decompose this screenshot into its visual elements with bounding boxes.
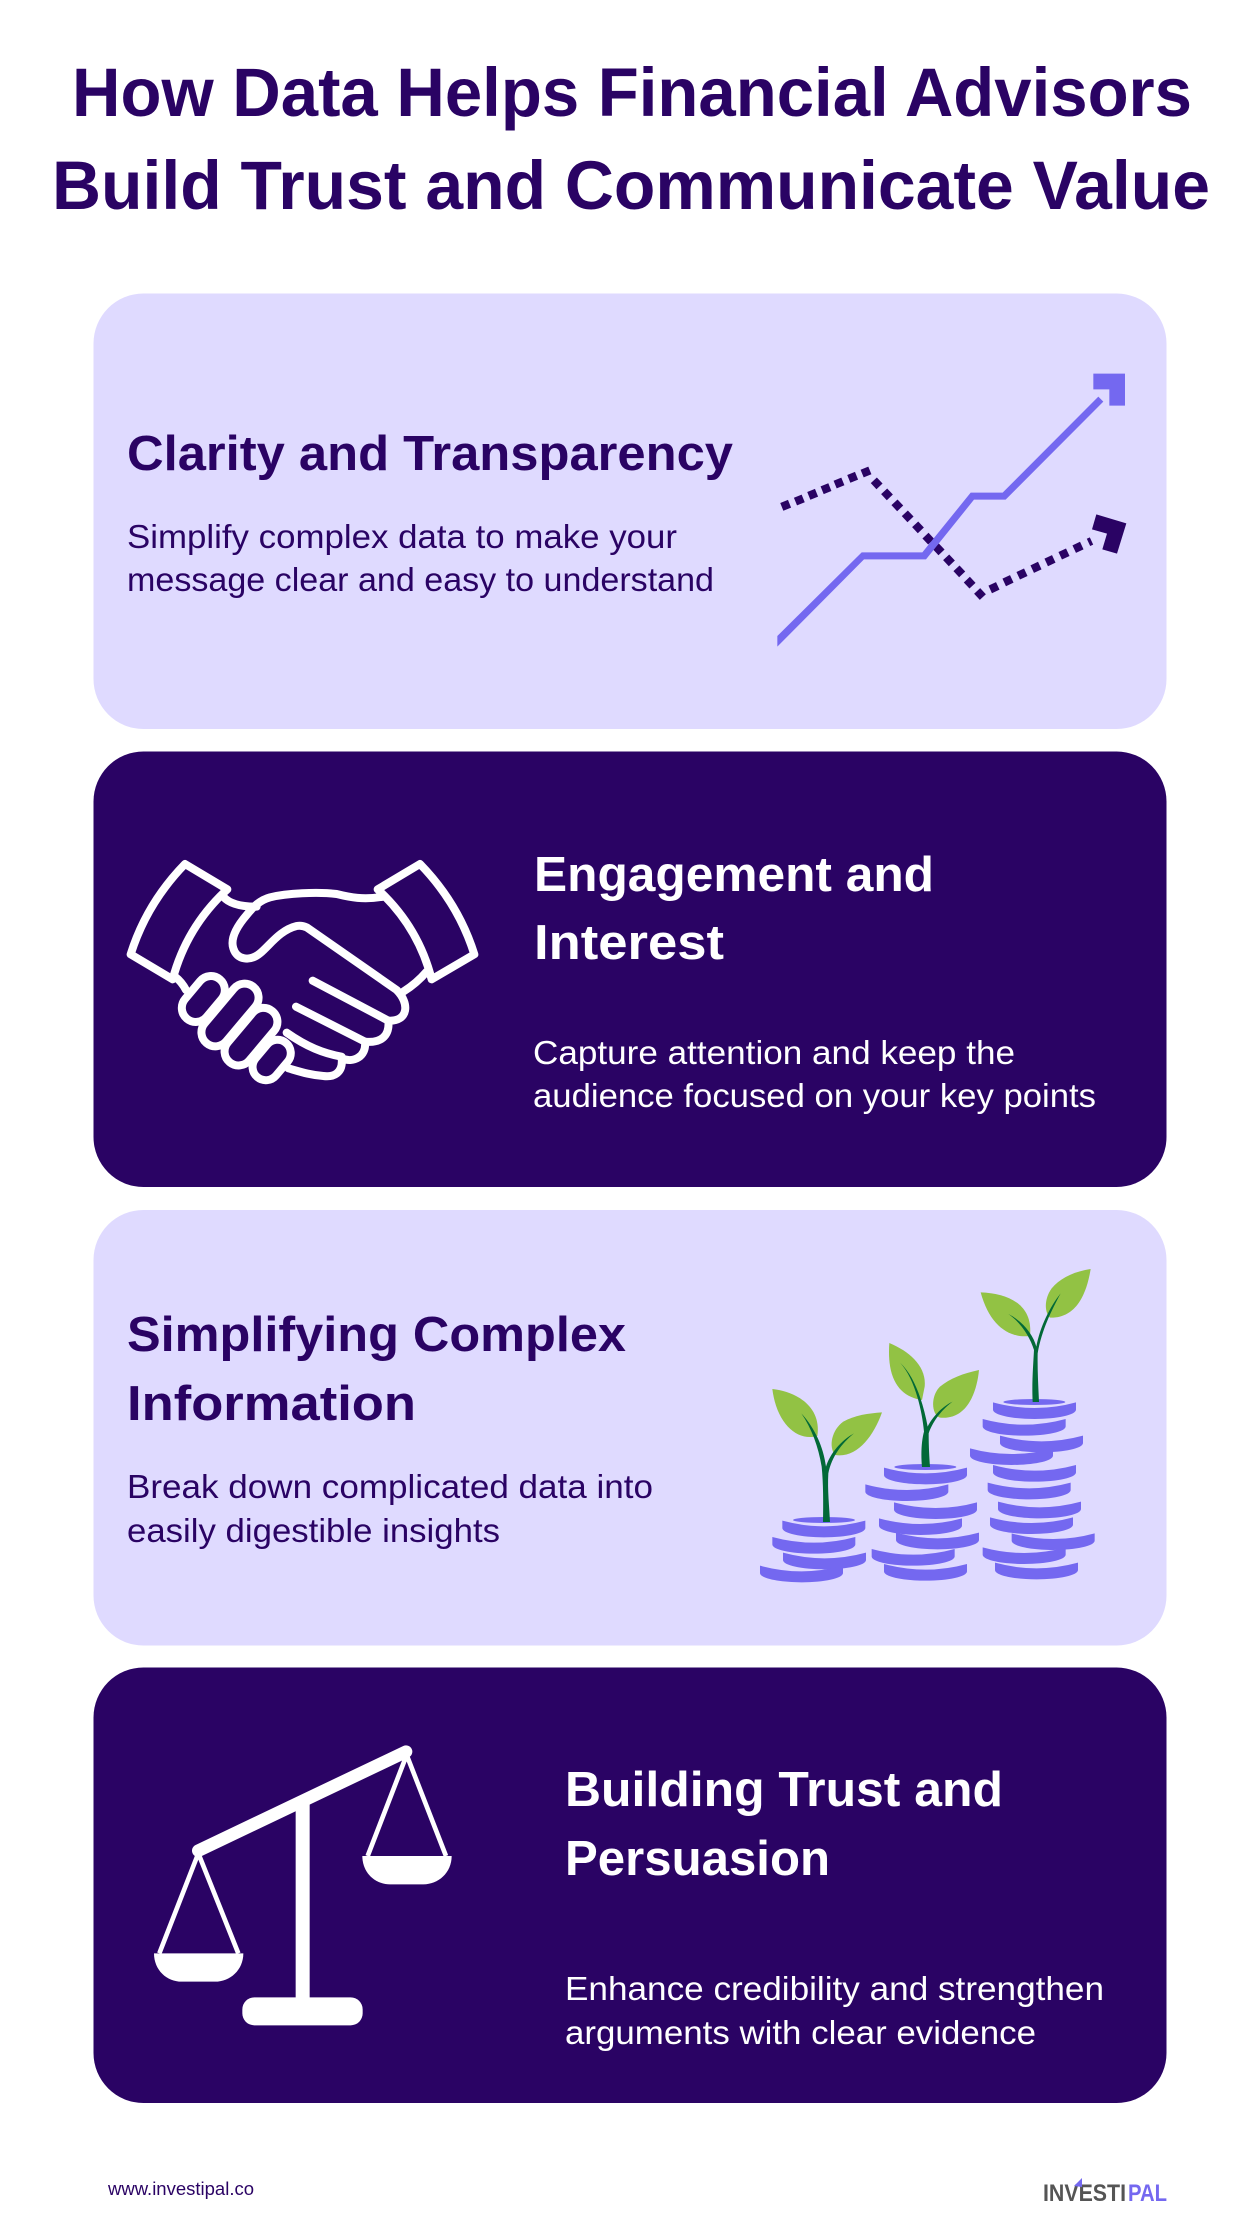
heading: clarity and transparency: Clarity and Transparency [127,427,733,481]
title: How Data Helps Financial Advisors [72,54,1192,131]
heading: simplifying complex information: Simplifying Complex [127,1308,626,1362]
footer: investipal logo: PAL [1128,2180,1167,2207]
heading: simplifying complex information [127,1308,626,1431]
text: simplifying description [127,1468,653,1549]
heading: engagement and interest: Engagement and [534,848,934,902]
panel: clarity and transparency [94,294,1166,729]
panel: engagement and interest [94,752,1166,1187]
text: clarity description: message clear and easy to understand [127,561,714,598]
panel: building trust and persuasion [94,1668,1166,2103]
text: engagement description: Capture attention and keep the [533,1034,1015,1071]
text: simplifying description: easily digestible insights [127,1512,500,1549]
text: clarity description: Simplify complex data to make your [127,518,677,555]
text: engagement description: audience focused on your key points [533,1077,1096,1114]
text: clarity description [127,518,714,598]
footer: website url: www.investipal.co [107,2179,254,2199]
title: Build Trust and Communicate Value [52,147,1210,224]
heading: building trust and persuasion: Persuasion [565,1832,830,1886]
text: building trust description: arguments with clear evidence [565,2014,1036,2051]
text: engagement description [533,1034,1096,1114]
icon: handshake [131,864,474,1086]
heading: engagement and interest [534,848,934,970]
icon: balance scales [154,1752,452,2025]
icon: coin stacks with growing plants [760,1269,1095,1582]
title [52,54,1210,224]
text: simplifying description: Break down complicated data into [127,1468,653,1505]
heading: simplifying complex information: Information [127,1377,416,1431]
text: building trust description [565,1970,1104,2051]
panel: simplifying complex information [94,1210,1166,1646]
footer: investipal logo: INVESTI [1043,2180,1126,2207]
text: building trust description: Enhance credibility and strengthen [565,1970,1104,2007]
icon: crossing trend lines with arrows [777,374,1126,647]
heading: engagement and interest: Interest [534,916,724,970]
heading: building trust and persuasion [565,1763,1003,1886]
heading: building trust and persuasion: Building Trust and [565,1763,1003,1817]
